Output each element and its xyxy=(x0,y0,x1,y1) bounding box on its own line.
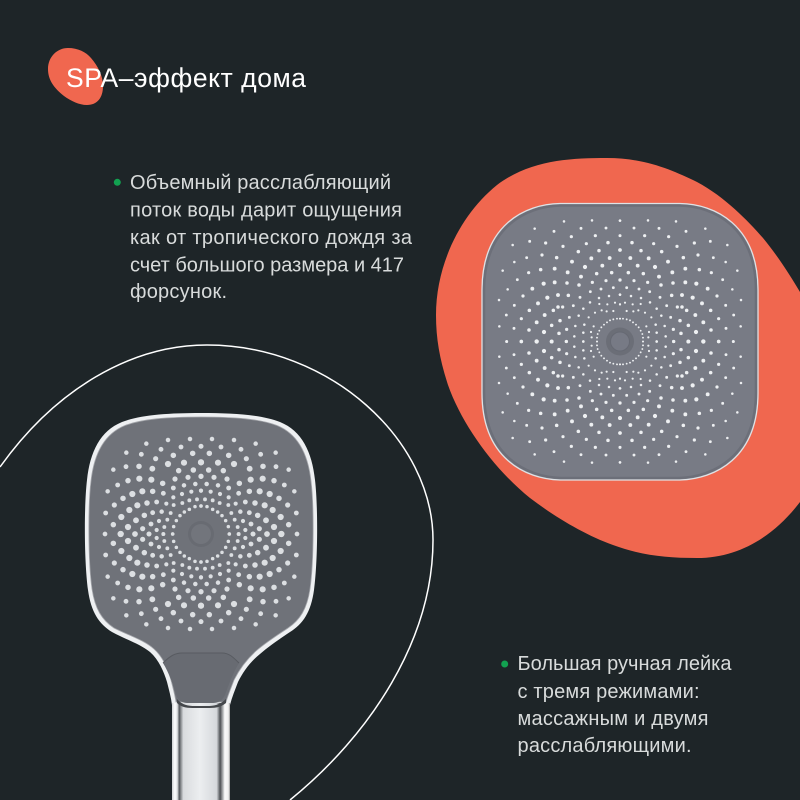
paragraph: расслабляющими. xyxy=(518,735,692,757)
paragraph: счет большого размера и 417 xyxy=(130,254,404,276)
paragraph: массажным и двумя xyxy=(518,708,708,730)
paragraph: Большая ручная лейка xyxy=(518,653,732,675)
paragraph xyxy=(518,653,732,757)
title blob xyxy=(48,48,103,105)
title: SPA–эффект дома xyxy=(66,63,306,93)
paragraph: поток воды дарит ощущения xyxy=(130,200,402,222)
rain shower head xyxy=(482,204,758,480)
bullet xyxy=(114,179,121,186)
mode button xyxy=(163,653,239,703)
nozzles xyxy=(498,219,742,464)
inner rim xyxy=(484,206,756,478)
head outline xyxy=(85,413,317,705)
hand shower xyxy=(85,413,317,800)
bullet xyxy=(501,660,508,668)
text block: rain flow xyxy=(114,172,413,303)
neck shadow xyxy=(177,699,226,708)
button top edge xyxy=(163,653,239,663)
red blob behind rain shower xyxy=(436,158,800,558)
center knob xyxy=(188,521,214,547)
paragraph: как от тропического дождя за xyxy=(130,227,413,249)
paragraph xyxy=(130,172,413,303)
paragraph: с тремя режимами: xyxy=(518,681,700,703)
white outline ring xyxy=(0,345,433,800)
nozzles xyxy=(103,437,299,631)
paragraph: Объемный расслабляющий xyxy=(130,172,391,194)
paragraph: форсунок. xyxy=(130,281,227,303)
head body xyxy=(482,204,758,480)
text block: hand shower xyxy=(501,653,732,757)
center knob xyxy=(606,328,634,356)
handle xyxy=(172,703,230,800)
face xyxy=(89,417,313,702)
